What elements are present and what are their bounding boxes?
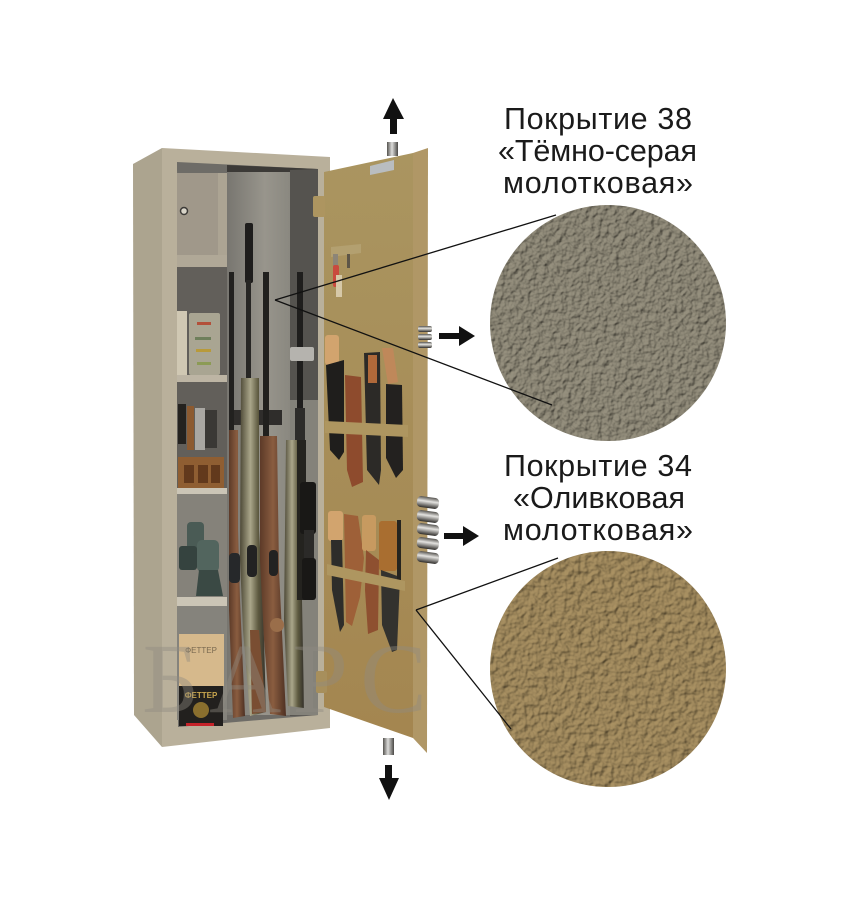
gun: wood stock right [260, 272, 286, 716]
shelves [177, 375, 227, 382]
binoculars [179, 522, 223, 596]
cabinet front frame [162, 148, 330, 747]
arrow: down [379, 765, 399, 800]
lower side bolts [416, 496, 440, 564]
cabinet interior [177, 162, 318, 727]
ammo boxes [179, 634, 224, 726]
lower knives [328, 511, 401, 652]
lower knife strap [327, 564, 405, 591]
arrow: right upper [439, 326, 475, 346]
swatch: dark grey hammered [490, 205, 726, 441]
callout lines: olive [416, 558, 558, 729]
ammo boxes: ФЕТТЕР [185, 691, 218, 700]
lure box [177, 311, 220, 375]
door label plate [370, 160, 394, 175]
label: coating 38: «Тёмно-серая [498, 134, 697, 168]
door panel [324, 153, 413, 738]
upper knife strap [325, 421, 408, 437]
callout lines: grey [275, 215, 556, 405]
ceiling shadow [227, 165, 318, 172]
upper knives [325, 335, 403, 487]
upper hinge [313, 196, 325, 217]
label: coating 34: Покрытие 34 [504, 449, 692, 483]
gun: wood stock left [229, 272, 245, 718]
right inner wall [290, 169, 318, 716]
bottom pin [383, 738, 394, 755]
arrow: up [383, 98, 404, 134]
top lockbox [177, 173, 218, 255]
reels and wooden rack [178, 404, 224, 488]
watermark: БАРС [142, 623, 427, 734]
shelf compartments [177, 267, 227, 375]
label: coating 34: «Оливковая [513, 481, 685, 515]
back panel [227, 172, 290, 715]
arrow: right lower [444, 526, 479, 546]
lower hinge [316, 671, 327, 693]
gun: camo with scope [284, 272, 316, 708]
label: coating 38: Покрытие 38 [504, 102, 692, 136]
open door [313, 142, 440, 755]
sling clip [290, 347, 314, 361]
cabinet side wall [133, 148, 162, 747]
top pin [387, 142, 398, 156]
label: coating 34: молотковая» [503, 513, 693, 547]
door edge strip [413, 148, 428, 753]
swatch: olive hammered [490, 551, 726, 787]
upper side bolts [418, 326, 432, 348]
ammo boxes: ФЕТТЕР [185, 646, 217, 655]
label: coating 38: молотковая» [503, 166, 693, 200]
gun: camo centre left [240, 223, 266, 716]
gun rack bar [229, 410, 282, 425]
safe cabinet [133, 148, 330, 747]
key hook bar [331, 244, 361, 297]
